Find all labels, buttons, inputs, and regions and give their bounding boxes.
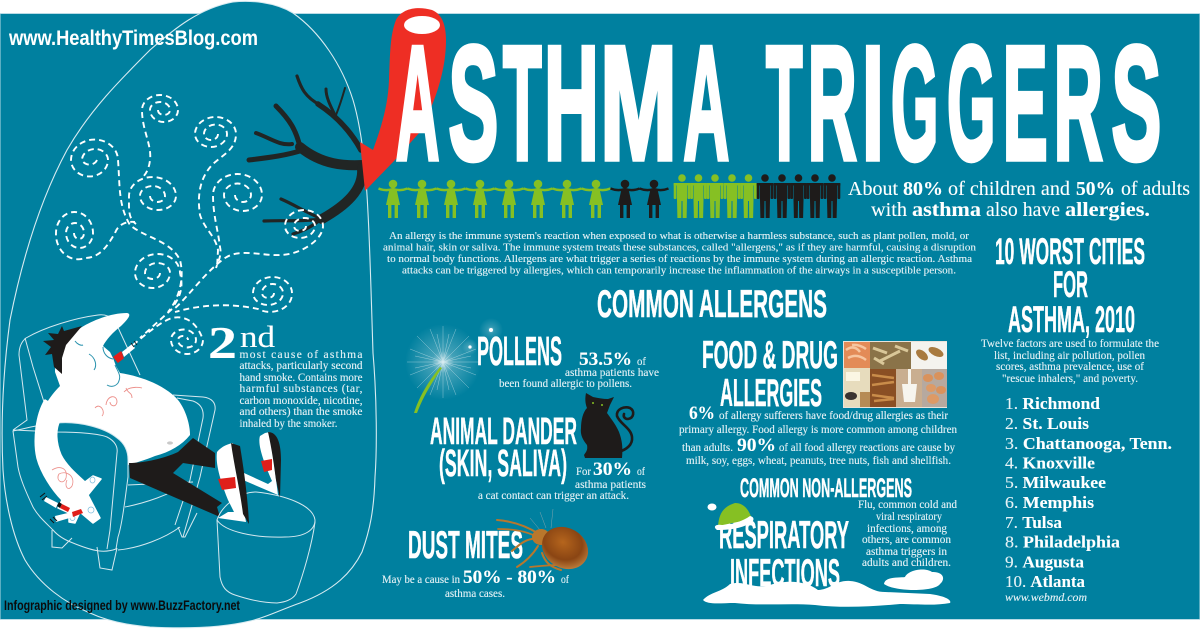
pictogram: adults with allergies <box>674 174 840 218</box>
list: worst cities: 6. Memphis <box>1005 493 1095 512</box>
text: second hand smoke <box>240 349 363 430</box>
title: G <box>891 13 938 194</box>
text: animal dander statistic: For <box>576 466 591 478</box>
trousers <box>129 438 222 517</box>
text: second hand smoke: inhaled by the smoker. <box>240 418 338 430</box>
icon: bronchial tree <box>249 76 363 234</box>
list: worst cities: 5. Milwaukee <box>1005 473 1106 492</box>
text: pollen statistic: asthma patients have <box>565 367 659 379</box>
icon: black cat <box>581 393 633 458</box>
heading: food and drug allergies: ALLERGIES <box>720 372 822 415</box>
title: E <box>1003 13 1048 194</box>
hand cigarettes <box>40 493 83 523</box>
facial lines <box>75 341 120 386</box>
title: R <box>1054 13 1103 194</box>
list: worst cities: 8. Philadelphia <box>1005 532 1120 552</box>
intro paragraph: animal hair, skin or saliva. The immune system treats these substances, called "allergens," as if they are harmful, causing a disruption <box>383 242 977 254</box>
text: ranking factors: list, including air pollution, pollen <box>994 350 1145 362</box>
text: ranking factors: Twelve factors are used to formulate the <box>981 338 1159 350</box>
statistic: children and adults with allergies: allergies. <box>1065 199 1150 221</box>
smoke swirls <box>56 95 323 354</box>
heading: respiratory infections: INFECTIONS <box>730 552 840 595</box>
text: food allergy statistics: 6% <box>689 404 715 424</box>
text: food allergy statistics: of all food allergy reactions are cause by <box>779 442 955 454</box>
ottoman <box>217 492 315 603</box>
text: pollen statistic: of <box>637 356 646 368</box>
heading: common allergens: COMMON ALLERGENS <box>597 283 827 326</box>
icon: dust mite <box>497 509 596 577</box>
infographic canvas: ANIMAL DANDER <box>430 411 577 453</box>
near foot and sock <box>217 443 249 524</box>
text: second hand smoke: and others) than the smoke <box>240 406 362 418</box>
text: pollen statistic: been found allergic to pollens. <box>499 378 632 390</box>
heading: 10 worst cities for asthma: FOR <box>1053 264 1088 305</box>
statistic: children and adults with allergies: with <box>871 199 907 221</box>
man's head and torso <box>40 313 190 465</box>
mouth cigarette <box>114 341 137 362</box>
list: worst cities: 9. Augusta <box>1005 552 1084 572</box>
list: worst cities: 10. Atlanta <box>1005 572 1085 591</box>
text: respiratory infections description: others, are common <box>862 534 951 546</box>
statistic: children and adults with allergies: 80% <box>903 178 943 200</box>
text: food allergy statistics: of allergy sufferers have food/drug allergies as their <box>719 410 948 422</box>
intro paragraph <box>383 230 977 276</box>
text: respiratory infections description: Flu, common cold and <box>858 499 957 511</box>
text: respiratory infections description <box>858 499 957 569</box>
heading: 10 worst cities for asthma <box>995 231 1145 340</box>
text: animal dander statistic <box>478 460 647 502</box>
text: dust mite statistic <box>382 568 569 600</box>
infographic canvas: POLLENS <box>477 328 562 374</box>
list: worst cities: 2. St. Louis <box>1005 414 1090 433</box>
arm and hand <box>35 400 101 523</box>
text: respiratory infections description: infections, among <box>867 523 947 535</box>
title: H <box>544 13 599 194</box>
statistic: children and adults with allergies: 50% <box>1076 178 1115 200</box>
infographic canvas: FOOD & DRUG <box>702 334 838 377</box>
list: worst cities: 3. Chattanooga, Tenn. <box>1005 434 1172 453</box>
text: pollen statistic <box>499 350 659 390</box>
source credit: www.webmd.com <box>1005 592 1087 604</box>
hair <box>43 326 82 374</box>
pictogram: children with allergies <box>378 180 668 218</box>
infographic canvas: COMMON NON-ALLERGENS <box>740 473 912 503</box>
title: R <box>808 13 857 194</box>
text: food allergy statistics: 90% <box>737 436 776 456</box>
text: ranking factors <box>981 338 1159 385</box>
website url: www.HealthyTimesBlog.com <box>8 27 258 50</box>
text: second hand smoke: hand smoke. Contains more <box>240 372 362 384</box>
lung outline <box>2 1 376 628</box>
text: animal dander statistic: a cat contact can trigger an attack. <box>478 490 629 502</box>
heading: animal dander: (SKIN, SALIVA) <box>439 443 567 485</box>
text: food allergy statistics: milk, soy, eggs, wheat, peanuts, tree nuts, fish and shellfish. <box>686 455 951 467</box>
title: G <box>947 13 996 194</box>
far foot and sock <box>243 432 281 498</box>
title: T <box>766 13 802 194</box>
text: animal dander statistic: 30% <box>593 460 632 480</box>
infographic canvas: RESPIRATORY <box>719 514 849 557</box>
text: dust mite statistic: May be a cause in <box>382 574 460 586</box>
fingernails <box>70 477 95 520</box>
text: second hand smoke: carbon monoxide, nicotine, <box>240 395 363 407</box>
title: I <box>862 13 884 194</box>
list: worst cities <box>1005 394 1172 591</box>
text: second hand smoke: attacks, particularly second <box>240 360 363 372</box>
list: worst cities: 4. Knoxville <box>1005 454 1095 472</box>
list: worst cities: 7. Tulsa <box>1005 513 1062 532</box>
text: respiratory infections description: adults and children. <box>862 557 951 569</box>
text: food allergy statistics <box>679 404 957 467</box>
title: A <box>684 13 728 194</box>
text: ranking factors: scores, asthma prevalence, use of <box>996 361 1144 373</box>
chair front arm <box>13 423 180 570</box>
designer credit: Infographic designed by www.BuzzFactory.net <box>4 598 240 613</box>
text: animal dander statistic: of <box>637 466 645 478</box>
list: worst cities: 1. Richmond <box>1005 394 1100 413</box>
statistic: children and adults with allergies: of children and <box>948 178 1070 200</box>
text: dust mite statistic: of <box>561 574 569 586</box>
statistic: children and adults with allergies: asthma <box>912 199 981 221</box>
text: food allergy statistics: primary allergy. Food allergy is more common among children <box>679 424 957 436</box>
intro paragraph: An allergy is the immune system's reaction when exposed to what is otherwise a harmless substance, such as plant pollen, mold, or <box>389 230 969 242</box>
text: dust mite statistic: 50% - 80% <box>463 568 556 588</box>
text: second hand smoke: harmful substances (tar, <box>240 383 363 395</box>
heading: respiratory infections <box>719 514 849 595</box>
text: pollen statistic: 53.5% <box>579 350 632 370</box>
text: second hand smoke: most cause of asthma <box>240 349 362 361</box>
text: respiratory infections description: asthma triggers in <box>866 546 947 558</box>
photo collage: allergenic foods <box>843 341 947 408</box>
infographic canvas: DUST MITES <box>408 524 523 567</box>
statistic: children and adults with allergies: About <box>848 178 898 200</box>
heading: food and drug allergies <box>702 334 838 415</box>
title: M <box>600 13 677 194</box>
heading: animal dander <box>430 411 577 485</box>
intro paragraph: attacks can be triggered by allergies, which can temporarily increase the inflammation of the airways in a susceptible person. <box>402 264 956 276</box>
statistic: children and adults with allergies: also have <box>986 199 1060 221</box>
statistic: children and adults with allergies: of adults <box>1121 178 1190 200</box>
icon: red inhaler ribbon <box>360 8 446 191</box>
intro paragraph: to normal body functions. Allergens are what trigger a series of reactions by the immune system during an allergic reaction. Asthma <box>387 253 972 265</box>
illustration: man smoking in armchair <box>13 313 315 603</box>
text: food allergy statistics: than adults. <box>682 442 733 454</box>
text: ranking factors: "rescue inhalers," and poverty. <box>1002 373 1138 385</box>
chair back <box>13 315 215 537</box>
text: dust mite statistic: asthma cases. <box>445 588 505 600</box>
arm squiggles <box>52 468 73 488</box>
icon: santa hat <box>708 503 754 530</box>
text: animal dander statistic: asthma patients <box>575 479 647 491</box>
chest hair squiggles <box>95 387 142 416</box>
heading: 2nd cause: nd <box>240 319 276 354</box>
belly button <box>167 441 173 445</box>
heading: 2nd cause <box>208 317 276 368</box>
title: A <box>396 13 439 194</box>
icon: sparkler <box>405 318 503 413</box>
heading: 2nd cause: 2 <box>208 317 237 368</box>
text: respiratory infections description: viral respiratory <box>876 511 942 523</box>
statistic: children and adults with allergies <box>848 178 1190 221</box>
title: S <box>448 13 498 194</box>
icon: snow drift <box>703 570 950 607</box>
title: T <box>503 13 542 194</box>
